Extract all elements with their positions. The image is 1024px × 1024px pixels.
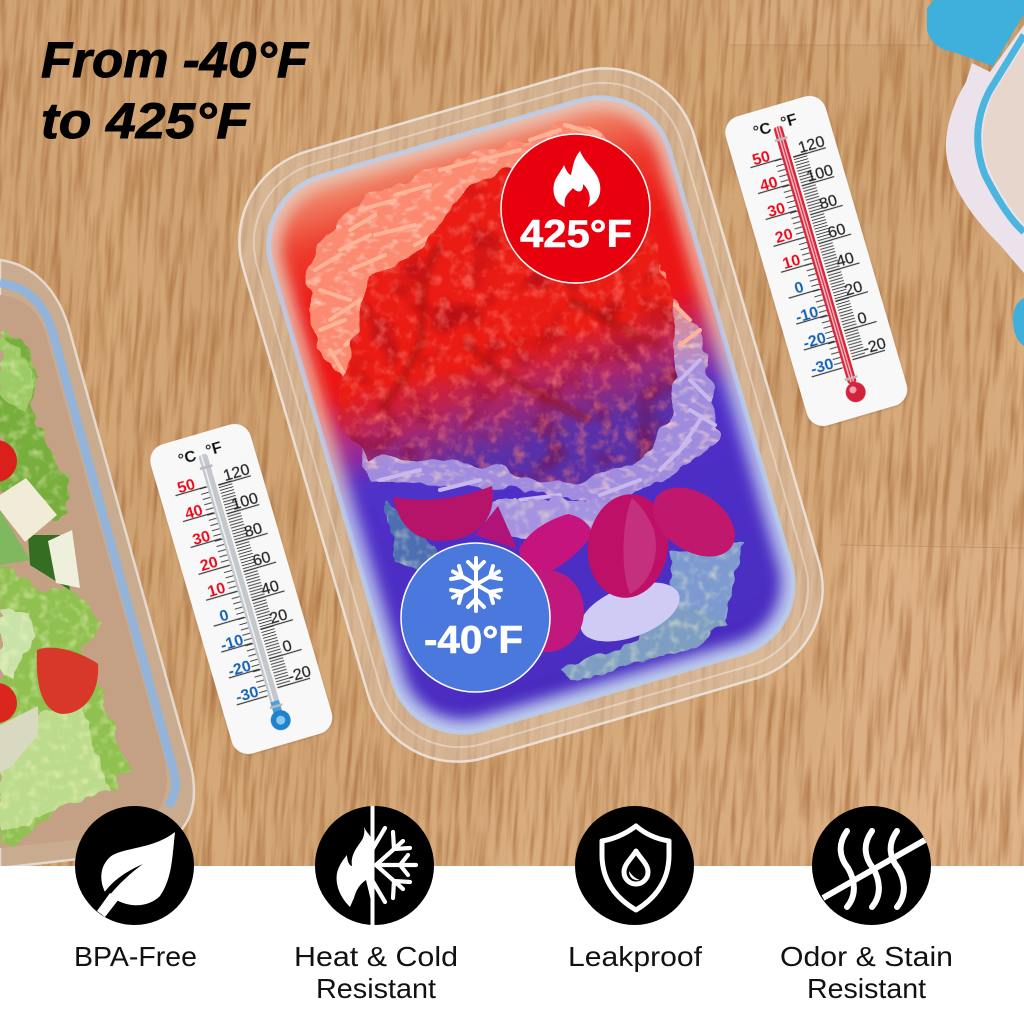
icon: snowflake xyxy=(451,558,501,611)
rice xyxy=(308,121,720,504)
steak xyxy=(337,169,676,486)
thermometer: left xyxy=(146,420,336,758)
salad xyxy=(0,332,130,845)
thermometer: left: 40 xyxy=(259,578,281,599)
thermometer: left: 20 xyxy=(268,606,290,628)
thermometer: left: -10 xyxy=(219,632,246,655)
thermometer: right: 100 xyxy=(805,162,835,186)
left container blue rim xyxy=(0,283,175,806)
icon: crossed-out steam xyxy=(812,806,931,925)
thermometer: left: 0 xyxy=(281,637,294,656)
title: From -40°F xyxy=(41,32,309,88)
steak folds xyxy=(380,245,660,420)
left container inner shade xyxy=(0,295,167,848)
left container glass xyxy=(0,260,194,868)
feature: Heat & Cold Resistant: Resistant xyxy=(316,973,436,1004)
label: Heat & Cold xyxy=(294,941,458,972)
thermometer: right: 0 xyxy=(856,309,869,328)
425°F label: 425°F xyxy=(520,213,632,256)
container glass body xyxy=(217,46,845,784)
thermometer: left: -20 xyxy=(226,658,253,681)
thermometer: right: 50 xyxy=(750,148,772,169)
label: BPA-Free xyxy=(74,941,197,972)
thermometer: right: °C xyxy=(751,120,774,141)
thermometer: left: 80 xyxy=(242,520,264,541)
thermometer: left: 0 xyxy=(218,607,231,626)
icon: half flame half snowflake xyxy=(315,806,434,925)
thermometer: left: -30 xyxy=(234,684,261,706)
thermometer: right: 40 xyxy=(758,174,780,195)
left container with salad xyxy=(0,260,194,868)
thermometer: right: -10 xyxy=(794,304,821,327)
thermometer: left: 50 xyxy=(175,476,197,497)
feature: Heat & Cold Resistant xyxy=(294,806,458,1004)
thermometer: left: 10 xyxy=(206,580,228,601)
thermometer: left: 40 xyxy=(183,502,205,523)
-40°F label: -40°F xyxy=(424,619,523,662)
icon: shield with drop xyxy=(575,806,694,925)
label: Leakproof xyxy=(568,941,702,972)
lid blue seal xyxy=(978,35,1024,232)
icon: flame xyxy=(553,151,600,207)
label: Odor & Stain xyxy=(780,941,953,972)
title: to 425°F xyxy=(41,93,251,149)
thermometer: right: 40 xyxy=(834,250,856,271)
thermometer: right: 80 xyxy=(817,192,839,213)
thermometer: right: 120 xyxy=(796,133,827,157)
icon: leaf xyxy=(75,806,194,925)
thermometer: left: 120 xyxy=(221,461,252,485)
thermometer: left: °C xyxy=(176,448,199,469)
thermometer: left: 20 xyxy=(198,554,220,575)
title xyxy=(41,32,309,149)
thermometer: left: °F xyxy=(204,439,224,460)
thermometer: right: -30 xyxy=(809,356,836,378)
blue clip xyxy=(927,0,1024,66)
lid body xyxy=(946,25,1024,273)
thermometer: right: 20 xyxy=(773,226,795,247)
small blue clip xyxy=(1013,298,1024,346)
thermometer: right: °F xyxy=(779,111,799,132)
feature: Leakproof xyxy=(568,806,702,972)
thermometer: left: 100 xyxy=(230,490,260,514)
thermometer: right: 0 xyxy=(793,279,806,298)
thermometer: left: 30 xyxy=(191,528,213,549)
thermometer: right: -20 xyxy=(861,335,888,358)
feature: BPA-Free xyxy=(74,806,197,972)
thermometer: right: 20 xyxy=(843,278,865,300)
feature: Odor & Stain Resistant: Resistant xyxy=(807,973,926,1004)
thermometer: right: 10 xyxy=(781,252,803,273)
thermometer: right: 30 xyxy=(766,200,788,221)
thermometer: left: -20 xyxy=(286,663,313,686)
thermometer: left: 60 xyxy=(251,549,273,570)
tomatoes xyxy=(393,473,748,652)
thermometer: right: -20 xyxy=(801,330,828,353)
salad under blue tint xyxy=(385,498,743,680)
badge: -40°F cold xyxy=(401,543,550,692)
main glass container xyxy=(217,46,845,784)
feature: Odor & Stain Resistant xyxy=(780,806,953,1004)
thermometer: right: 60 xyxy=(826,221,848,242)
top right lid with blue clips xyxy=(927,0,1024,346)
lid inner xyxy=(983,45,1024,224)
badge: 425°F hot xyxy=(501,134,650,283)
thermometer: right xyxy=(721,92,911,430)
white footer band xyxy=(0,866,1024,1024)
